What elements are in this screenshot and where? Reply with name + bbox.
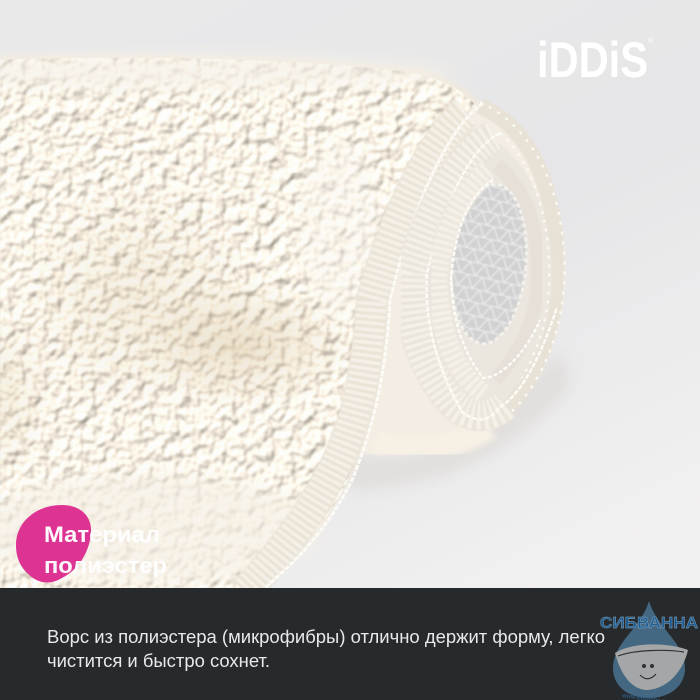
inner coil of the mat — [490, 132, 550, 386]
outer coil of the mat — [355, 98, 565, 455]
stitched border of the third coil — [437, 170, 540, 393]
caption text: чистится и быстро сохнет. — [47, 651, 270, 671]
photo: rolled bath mat on grey background — [0, 54, 571, 588]
floor shadow under roll — [351, 360, 569, 490]
bath tub — [615, 644, 688, 690]
stitched border of the mat front edge — [245, 103, 483, 592]
bottom caption panel — [0, 588, 700, 700]
brand logo: IDDIS: iDDiS — [537, 32, 648, 88]
badge text: полиэстер — [44, 553, 167, 578]
watermark name: СИБВАННА — [600, 615, 698, 632]
badge: material polyester — [16, 505, 167, 582]
pile surface of the mat — [0, 54, 480, 588]
badge text: Материал — [44, 522, 160, 547]
tub face — [640, 664, 656, 679]
mat underside: anti-slip pattern — [450, 183, 528, 345]
caption text: Ворс из полиэстера (микрофибры) отлично держит форму, легко — [47, 627, 605, 647]
water drop — [613, 601, 685, 698]
stitched border of the second coil — [411, 133, 557, 419]
watermark logo: Sibvanna — [600, 601, 698, 700]
pink blob — [16, 505, 91, 582]
registered mark: ® — [648, 37, 654, 45]
